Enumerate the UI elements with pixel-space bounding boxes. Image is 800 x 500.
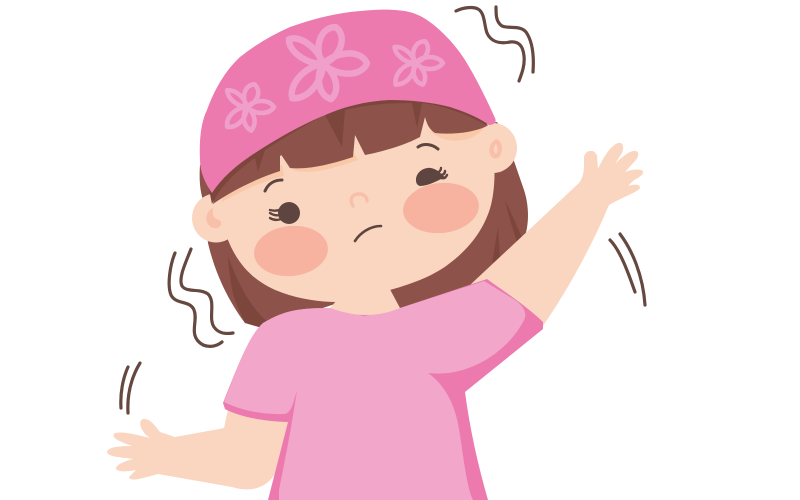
motion lines: left hand [121,363,140,413]
flower: left [223,82,274,132]
mouth [355,226,381,241]
right arm and hand [470,143,643,340]
cheek right [401,179,481,237]
fringe hair [205,80,488,204]
hair back [200,122,528,328]
right ear [469,123,517,173]
cheek left [252,222,330,280]
fringe shadow [222,127,485,202]
left ear [192,194,240,242]
nose [351,194,367,206]
flower: large [285,24,367,104]
motion lines: top right [456,7,533,81]
shirt dark base [223,279,543,500]
right eye [416,168,447,186]
motion lines: left of head [169,249,233,346]
flower: right [391,38,443,89]
neck [330,280,400,315]
left eyebrow [265,180,282,191]
left arm and hand [107,400,300,489]
right eyebrow [418,145,438,149]
bandana [200,10,496,193]
face [213,110,494,302]
fringe dark strip and wedges [205,90,488,204]
shirt light front [224,281,525,500]
motion lines: right arm [610,234,645,305]
left eye [270,202,300,224]
t-shirt [223,279,543,500]
